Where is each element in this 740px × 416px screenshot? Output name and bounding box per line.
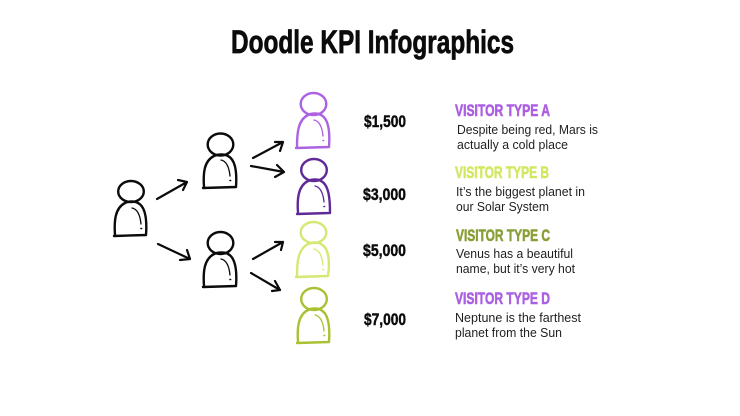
description B: It’s the biggest planet in <box>456 184 585 199</box>
description C: name, but it’s very hot <box>456 261 575 276</box>
diagram: visitor tree <box>114 93 330 343</box>
value: $7,000: $7,000 <box>364 310 406 329</box>
icon: root person <box>114 181 146 236</box>
value: $3,000: $3,000 <box>363 185 406 204</box>
description A <box>457 122 598 152</box>
value: $5,000: $5,000 <box>363 241 406 260</box>
description D: Neptune is the farthest <box>455 310 581 325</box>
text block: visitor type D <box>455 290 581 340</box>
heading: visitor type B: VISITOR TYPE B <box>455 164 549 182</box>
heading: visitor type A: VISITOR TYPE A <box>455 102 550 120</box>
arrow: lower to D <box>251 273 280 291</box>
description C: Venus has a beautiful <box>456 246 573 261</box>
heading: visitor type D: VISITOR TYPE D <box>455 290 550 308</box>
description A: Despite being red, Mars is <box>457 122 598 137</box>
heading: visitor type C: VISITOR TYPE C <box>456 227 550 245</box>
arrow: root to upper <box>157 180 187 199</box>
text block: visitor type C <box>456 227 575 276</box>
text block: visitor type A <box>455 102 598 152</box>
icon: green person D <box>297 288 329 343</box>
value: $1,500: $1,500 <box>364 112 406 131</box>
arrow: upper to B <box>251 165 284 177</box>
title: Doodle KPI Infographics <box>231 24 514 60</box>
description B: our Solar System <box>456 199 549 214</box>
arrow: root to lower <box>158 244 190 260</box>
icon: light green person C <box>296 222 329 277</box>
icon: dark purple person B <box>297 159 330 214</box>
description D <box>455 310 581 340</box>
icon: purple person A <box>296 93 329 148</box>
arrow: lower to C <box>253 242 283 259</box>
description A: actually a cold place <box>457 137 568 152</box>
arrow: upper to A <box>253 142 283 158</box>
description C <box>456 246 575 276</box>
icon: lower middle person <box>203 232 236 287</box>
description B <box>456 184 585 214</box>
icon: upper middle person <box>203 134 236 188</box>
description D: planet from the Sun <box>455 325 562 340</box>
text block: visitor type B <box>455 164 585 214</box>
